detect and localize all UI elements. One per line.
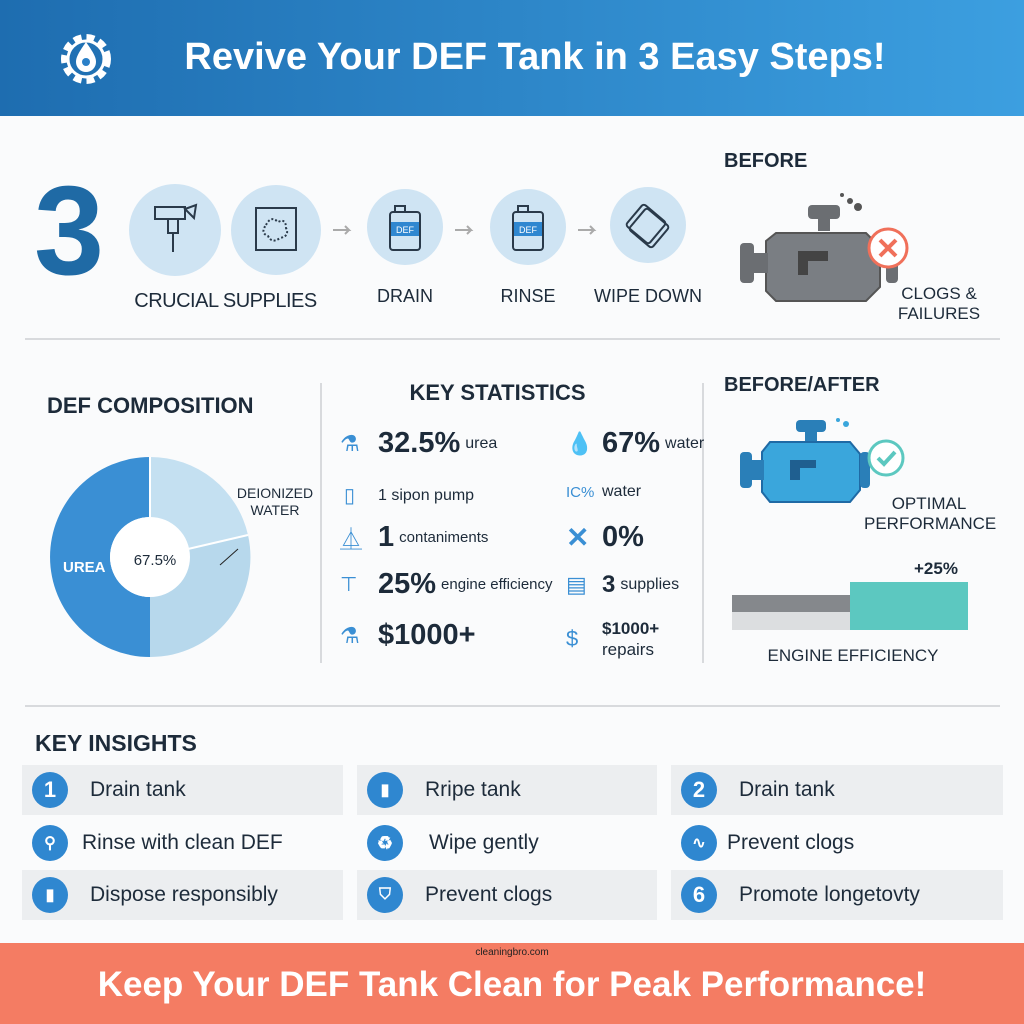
- title: Revive Your DEF Tank in 3 Easy Steps!: [184, 36, 886, 78]
- donut chart: UREA: [63, 559, 106, 576]
- panel: key statistics: ⚗: [340, 622, 360, 648]
- panel: key statistics: engine efficiency: [441, 576, 553, 593]
- heading: before: BEFORE: [724, 150, 807, 172]
- stats right column: [566, 427, 704, 459]
- panel: key statistics: 1: [378, 521, 394, 553]
- label: deionized water: [237, 485, 313, 518]
- footer tagline: Keep Your DEF Tank Clean for Peak Performance!: [98, 965, 926, 1004]
- panel: key statistics: $: [566, 626, 578, 651]
- panel: before/after: [724, 374, 996, 665]
- insights grid: Prevent clogs: [727, 831, 854, 854]
- insights grid: ⚲: [44, 835, 56, 852]
- panel: key statistics: 3: [602, 571, 615, 598]
- label: deionized water: DEIONIZED: [237, 485, 313, 501]
- donut chart: [50, 457, 250, 657]
- icon: gear with drop: [61, 34, 111, 84]
- insights grid: Drain tank: [739, 778, 835, 801]
- before panel: [724, 150, 980, 323]
- heading: BEFORE/AFTER: [724, 374, 880, 396]
- panel: key statistics: IC%: [566, 484, 594, 500]
- label: optimal performance: PERFORMANCE: [864, 514, 996, 533]
- bar chart: engine efficiency: [732, 559, 968, 665]
- insights grid: ▮: [46, 887, 54, 904]
- icon: clean engine: [740, 418, 904, 503]
- label: clogs: [898, 284, 980, 323]
- step labels: CRUCIAL SUPPLIES: [134, 290, 317, 312]
- insights grid: Drain tank: [90, 778, 186, 801]
- insights grid: Prevent clogs: [425, 883, 552, 906]
- panel: key statistics: contaniments: [399, 529, 488, 546]
- label: optimal performance: OPTIMAL: [892, 494, 966, 513]
- panel: key statistics: $1000+: [602, 619, 659, 638]
- footer banner: [0, 943, 1024, 1024]
- panel: key statistics: ✕: [566, 522, 589, 553]
- source credit: cleaningbro.com: [475, 947, 549, 958]
- insights grid: ♻: [377, 832, 393, 852]
- panel: key statistics: supplies: [620, 576, 679, 593]
- panel: key statistics: 25%: [378, 568, 436, 600]
- insights grid: ⛉: [379, 886, 391, 903]
- stats left column: ⚗: [340, 430, 360, 456]
- insights grid: 2: [693, 777, 705, 802]
- label: clogs: FAILURES: [898, 304, 980, 323]
- panel: key statistics: water: [602, 483, 641, 500]
- header banner: [0, 0, 1024, 116]
- step: supplies icons: [129, 184, 686, 276]
- steps row: RINSE: [500, 286, 556, 306]
- panel: DEF composition: [47, 393, 313, 657]
- panel: key statistics: 1 sipon pump: [378, 486, 474, 504]
- heading: key insights: KEY INSIGHTS: [35, 730, 197, 756]
- donut chart: 67.5%: [134, 552, 176, 569]
- panel: key statistics: 0%: [602, 521, 644, 553]
- insights grid: Wipe gently: [429, 831, 539, 854]
- stats right column: 67%: [602, 427, 660, 459]
- label: clogs: CLOGS &: [901, 284, 977, 303]
- steps row: [129, 184, 702, 312]
- stats right column: 💧: [566, 430, 593, 456]
- panel: key statistics: ▤: [566, 572, 587, 597]
- panel: key statistics: [340, 380, 704, 659]
- insights grid: 1: [44, 777, 56, 802]
- panel: key statistics: ▯: [344, 485, 355, 507]
- panel: key statistics: ⊤: [340, 574, 357, 596]
- panel: key statistics: $1000+: [378, 619, 476, 651]
- stats right column: water: [665, 434, 704, 452]
- insights grid: ▮: [381, 782, 389, 799]
- insights grid: Promote longetovty: [739, 883, 920, 906]
- stats left column: [340, 427, 498, 459]
- label: optimal performance: [864, 494, 996, 533]
- big number 3: 3: [34, 160, 104, 301]
- step: supplies icons: DEF: [396, 225, 415, 235]
- insights grid: 6: [693, 882, 705, 907]
- label: deionized water: WATER: [250, 502, 300, 518]
- steps row: DRAIN: [377, 286, 433, 306]
- icon: dirty engine: [740, 193, 908, 302]
- panel: key statistics: ⏅: [340, 526, 362, 552]
- insights grid: [22, 765, 1003, 920]
- bar chart: engine efficiency: ENGINE EFFICIENCY: [768, 646, 938, 665]
- step: supplies icons: DEF: [519, 225, 538, 235]
- insights grid: Dispose responsibly: [90, 883, 278, 906]
- stats left column: 32.5%: [378, 427, 460, 459]
- insights grid: Rinse with clean DEF: [82, 831, 283, 854]
- bar chart: engine efficiency: +25%: [914, 559, 958, 578]
- heading: DEF COMPOSITION: [47, 393, 254, 418]
- stats left column: urea: [465, 434, 497, 452]
- steps row: WIPE DOWN: [594, 286, 702, 306]
- panel: key statistics: repairs: [602, 640, 654, 659]
- insights grid: Rripe tank: [425, 778, 521, 801]
- insights grid: ∿: [692, 835, 706, 852]
- heading: KEY STATISTICS: [409, 380, 586, 405]
